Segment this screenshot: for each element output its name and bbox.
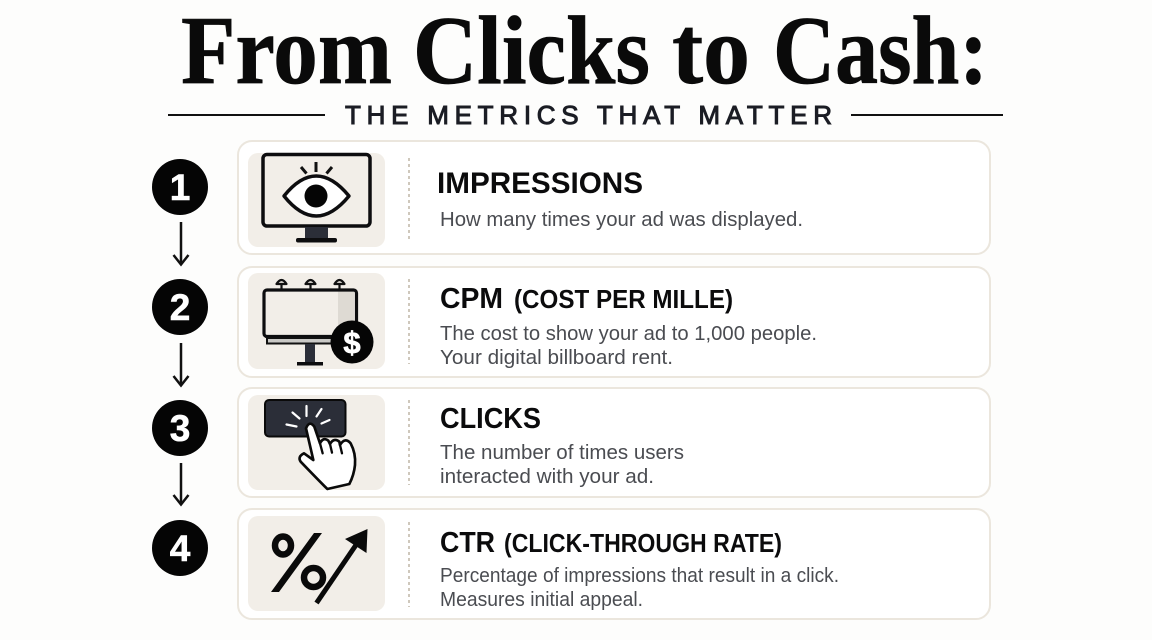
icon: billboard with dollar bbox=[264, 280, 374, 366]
step 2 number bbox=[152, 279, 208, 335]
panel: impressions bbox=[238, 141, 990, 254]
icon: percent with rising arrow bbox=[271, 529, 368, 603]
description: The cost to show your ad to 1,000 people. bbox=[440, 322, 817, 345]
description: The number of times users bbox=[440, 441, 684, 464]
heading: CLICKS bbox=[440, 403, 541, 435]
step 4 number: 4 bbox=[170, 528, 191, 569]
description: How many times your ad was displayed. bbox=[440, 208, 803, 231]
heading: (COST PER MILLE) bbox=[514, 284, 733, 314]
step 1 number bbox=[152, 159, 208, 215]
panel: cpm bbox=[238, 267, 990, 377]
heading bbox=[440, 527, 782, 559]
arrow: step 2 to 3 bbox=[174, 343, 188, 386]
step 3 number bbox=[152, 400, 208, 456]
heading: (CLICK-THROUGH RATE) bbox=[504, 528, 782, 558]
description: interacted with your ad. bbox=[440, 465, 654, 488]
title: Cash: bbox=[773, 0, 988, 105]
step 3 number: 3 bbox=[170, 408, 190, 449]
step 4 number bbox=[152, 520, 208, 576]
icon: monitor with eye bbox=[263, 154, 370, 242]
icon: hand clicking button bbox=[265, 400, 355, 489]
arrow: step 1 to 2 bbox=[174, 222, 188, 264]
step 1 number: 1 bbox=[170, 167, 190, 208]
title: Clicks bbox=[413, 0, 650, 105]
panel: clicks bbox=[238, 388, 990, 497]
panel: ctr bbox=[238, 509, 990, 619]
title: to bbox=[672, 0, 750, 105]
description: Measures initial appeal. bbox=[440, 588, 643, 611]
heading: CPM bbox=[440, 283, 503, 315]
description bbox=[440, 322, 817, 369]
heading: IMPRESSIONS bbox=[437, 167, 643, 200]
description: Your digital billboard rent. bbox=[440, 346, 673, 369]
step 2 number: 2 bbox=[170, 287, 190, 328]
heading bbox=[440, 283, 733, 315]
icon: billboard with dollar: $ bbox=[343, 325, 361, 360]
title bbox=[181, 0, 988, 105]
title: From bbox=[181, 0, 392, 105]
description: Percentage of impressions that result in a click. bbox=[440, 564, 839, 587]
arrow: step 3 to 4 bbox=[174, 463, 188, 504]
heading: CTR bbox=[440, 527, 495, 559]
subtitle with rules: THE METRICS THAT MATTER bbox=[345, 100, 832, 130]
description bbox=[440, 441, 684, 488]
description bbox=[440, 564, 839, 611]
